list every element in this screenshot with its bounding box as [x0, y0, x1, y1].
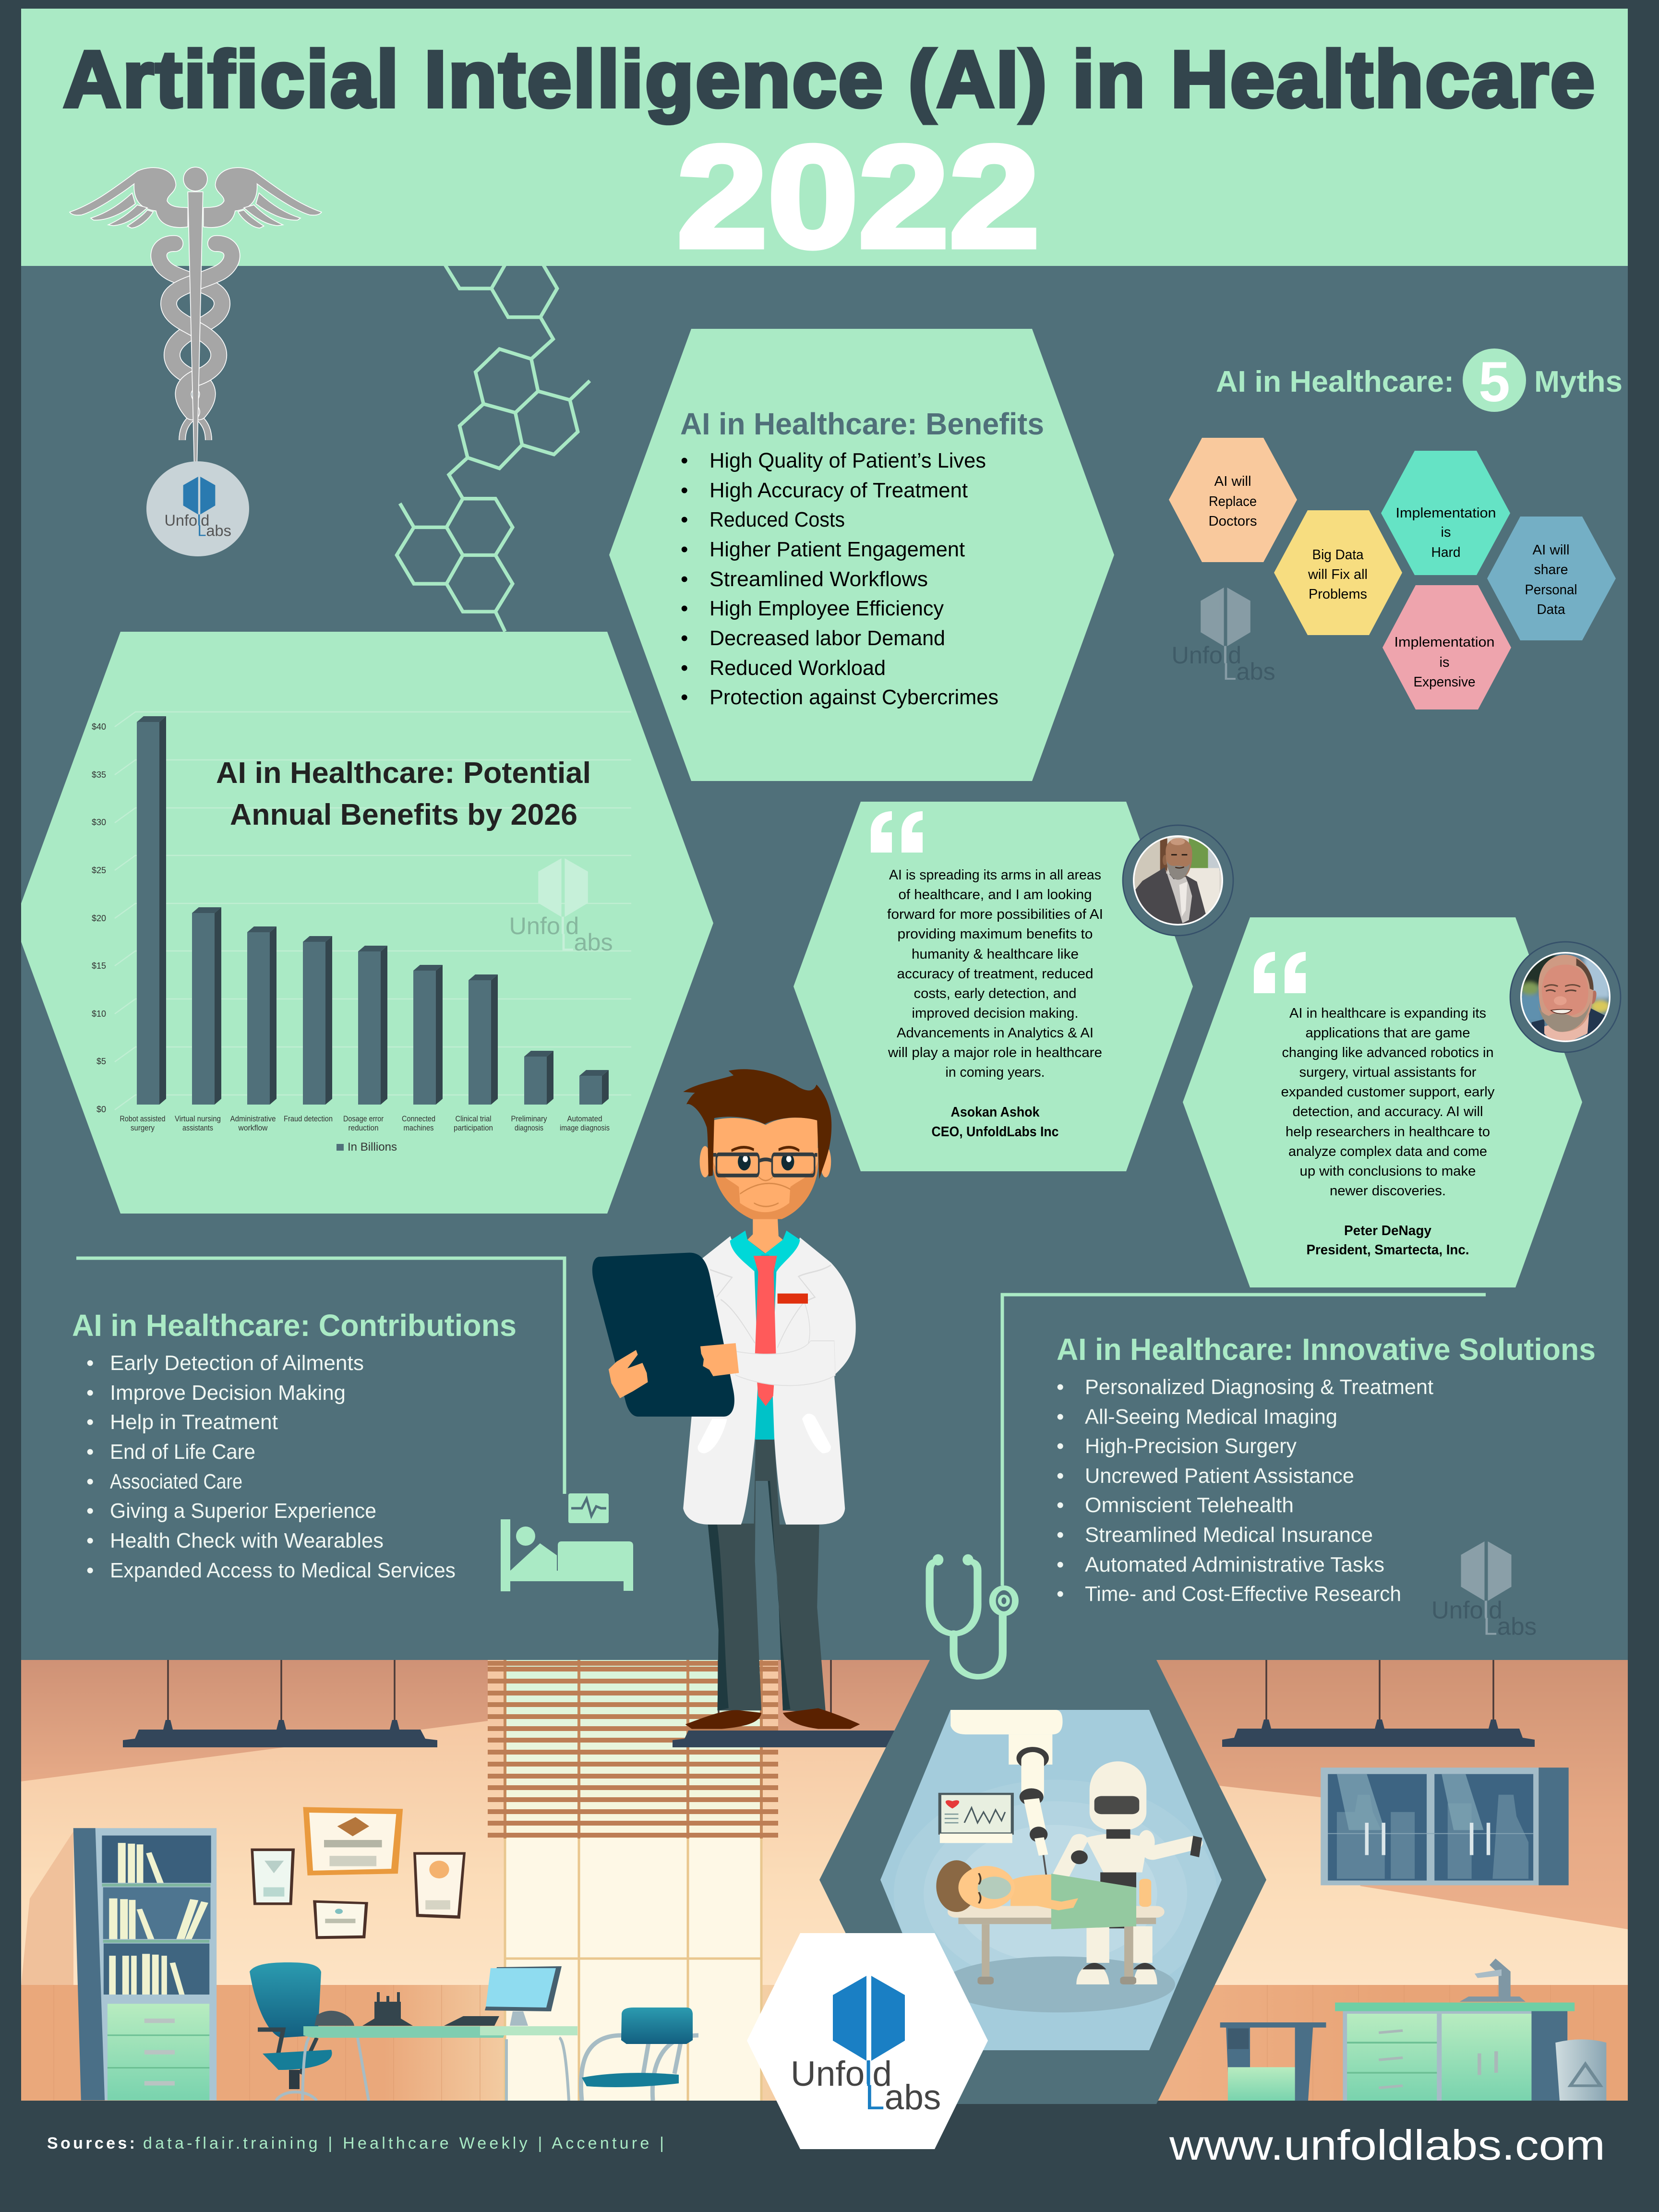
list: benefits: • [681, 656, 688, 680]
list: benefits: High Employee Efficiency [709, 597, 944, 620]
eyebrows [732, 1147, 799, 1151]
quote text: forward for more possibilities of AI [887, 907, 1103, 922]
hexagon: personal data: Personal [1525, 582, 1577, 598]
quote text: President, Smartecta, Inc. [1307, 1242, 1469, 1258]
list: benefits: Higher Patient Engagement [709, 538, 965, 561]
doctor character [592, 1069, 860, 1729]
quote text: AI is spreading its arms in all areas [889, 867, 1101, 883]
website url: www.unfoldlabs.com [1169, 2121, 1605, 2169]
coat pockets [697, 1414, 831, 1454]
list: benefits: • [681, 538, 688, 561]
list: benefits: Reduced Costs [709, 508, 845, 531]
chart y axis labels: $20 [92, 914, 106, 923]
list: innovative solutions: Omniscient Telehealth [1085, 1493, 1294, 1517]
header band [21, 9, 1628, 266]
desk and chairs [250, 1962, 698, 2101]
wainscot [21, 1985, 1628, 2101]
list: contributions: • [86, 1559, 94, 1582]
hexagon: replace doctors: AI will [1214, 474, 1251, 489]
chart category labels: image diagnosis [560, 1123, 610, 1132]
chart category labels: assistants [182, 1123, 213, 1132]
list: innovative solutions [1057, 1375, 1433, 1606]
chart title: AI in Healthcare: Potential [216, 757, 591, 790]
hexagon: replace doctors [1169, 438, 1297, 562]
office chair [250, 1962, 321, 2038]
list: contributions: Improve Decision Making [110, 1381, 346, 1405]
hexagon: personal data: AI will [1532, 542, 1570, 558]
Unfold Labs logo hexagon [747, 1933, 988, 2149]
list: contributions: • [86, 1410, 94, 1434]
list: innovative solutions: • [1057, 1582, 1064, 1606]
chart y axis labels: $10 [92, 1009, 106, 1019]
hexagon: big data: Big Data [1312, 547, 1364, 563]
list: benefits: Streamlined Workflows [709, 567, 928, 591]
panel: annual benefits chart [21, 632, 713, 1214]
watermark logo: solutions [1431, 1541, 1537, 1640]
face [713, 1148, 818, 1219]
list: innovative solutions: All-Seeing Medical Imaging [1085, 1405, 1337, 1429]
icon: quote mark [871, 811, 923, 853]
shoes [685, 1708, 860, 1729]
icon: stethoscope with connector [930, 1295, 1486, 1677]
chart y axis labels: $40 [92, 722, 106, 732]
hexagon: big data: will Fix all [1308, 567, 1368, 582]
quote text [887, 867, 1103, 1140]
heading: myths: AI in Healthcare: [1216, 365, 1454, 398]
quote text: will play a major role in healthcare [888, 1045, 1102, 1060]
ears [700, 1146, 831, 1178]
hexagon: implementation hard [1381, 451, 1510, 575]
quote text: Asokan Ashok [950, 1105, 1040, 1120]
list: benefits: • [681, 567, 688, 591]
list: benefits: • [681, 479, 688, 502]
chart category labels: diagnosis [515, 1123, 543, 1132]
quote text: CEO, UnfoldLabs Inc [931, 1124, 1059, 1140]
chart y axis labels: $25 [92, 866, 106, 875]
icon: caduceus [70, 167, 322, 464]
list: contributions: Associated Care [110, 1470, 242, 1493]
hands [609, 1343, 739, 1398]
list: benefits: • [681, 597, 688, 620]
logo badge: circle: Unfold [164, 512, 209, 529]
hexagon: implementation expensive: is [1440, 655, 1449, 670]
list: innovative solutions: Uncrewed Patient Assistance [1085, 1464, 1354, 1488]
connector line: contributions [76, 1258, 565, 1494]
list: benefits: Decreased labor Demand [709, 626, 945, 650]
right wall cabinet and sink [1220, 1767, 1606, 2101]
hexagon: implementation expensive [1382, 585, 1511, 709]
list: benefits: Protection against Cybercrimes [709, 685, 998, 709]
bar chart [137, 716, 609, 1105]
list: contributions: • [86, 1499, 94, 1523]
neck [747, 1214, 783, 1254]
chart category labels: Clinical trial [455, 1114, 492, 1123]
quote text: surgery, virtual assistants for [1299, 1065, 1477, 1080]
list: contributions: Help in Treatment [110, 1410, 278, 1434]
robot surgery illustration [894, 1710, 1217, 2012]
list: benefits: Reduced Workload [709, 656, 886, 680]
window [488, 1660, 778, 2101]
hexagon: personal data: share [1534, 562, 1568, 577]
panel: quote Peter DeNagy [1183, 917, 1621, 1287]
list: benefits: • [681, 508, 688, 531]
folded arm [736, 1341, 835, 1385]
list: contributions: • [86, 1351, 94, 1375]
list: contributions: • [86, 1440, 94, 1464]
quote text: AI in healthcare is expanding its [1289, 1006, 1486, 1021]
heading: benefits: AI in Healthcare: Benefits [680, 407, 1044, 441]
quote text: humanity & healthcare like [912, 947, 1079, 962]
chart category labels: surgery [131, 1123, 155, 1132]
watermark logo: myths: Unfold [1172, 641, 1241, 669]
watermark logo: chart: Unfold [509, 912, 579, 939]
quote text [1281, 1006, 1495, 1258]
watermark logo: myths [1172, 588, 1275, 685]
hexagon: implementation expensive: Implementation [1394, 635, 1495, 650]
year 2022: 2022 [677, 116, 1040, 277]
chart category labels: participation [454, 1123, 493, 1132]
list: contributions: Expanded Access to Medical Services [110, 1559, 456, 1582]
list: innovative solutions: • [1057, 1493, 1064, 1517]
list: benefits: High Accuracy of Treatment [709, 479, 968, 502]
quote text: changing like advanced robotics in [1282, 1045, 1494, 1060]
hexagon: replace doctors: Replace [1209, 494, 1257, 509]
quote text: applications that are game [1306, 1025, 1470, 1041]
chart category labels [120, 1114, 610, 1132]
collar [730, 1231, 800, 1272]
chart y axis labels: $5 [96, 1057, 106, 1066]
watermark logo: myths: Labs [1223, 658, 1275, 685]
chart category labels: machines [403, 1123, 434, 1132]
ceiling lamps [123, 1660, 1535, 1747]
trousers [708, 1440, 826, 1713]
quote text: costs, early detection, and [914, 986, 1076, 1001]
desk legs [302, 2038, 569, 2101]
hexagon: replace doctors: Doctors [1209, 514, 1257, 529]
chart category labels: Connected [402, 1114, 435, 1123]
hexagon: implementation hard: is [1441, 525, 1451, 540]
chart title: Annual Benefits by 2026 [230, 798, 577, 831]
sources footer: data-flair.training | Healthcare Weekly | Accenture | [143, 2134, 664, 2152]
desk items [485, 1966, 562, 2011]
chart category labels: workflow [238, 1123, 268, 1132]
hexagon: personal data: Data [1537, 602, 1565, 617]
list: benefits: • [681, 449, 688, 472]
molecule hexagon network [397, 263, 590, 632]
quote text: in coming years. [946, 1065, 1045, 1080]
logo badge: circle [146, 461, 249, 556]
wall certificates [251, 1807, 466, 1939]
hexagon: personal data [1487, 517, 1616, 640]
panel: innovative solutions [1057, 1332, 1596, 1640]
hexagon: big data [1274, 510, 1402, 635]
bookcase wall shadow [21, 1831, 73, 1985]
watermark logo: solutions: Labs [1483, 1613, 1537, 1640]
chart category labels: Automated [567, 1114, 602, 1123]
list: contributions [86, 1351, 456, 1582]
quote text: detection, and accuracy. AI will [1292, 1104, 1483, 1119]
quote text: up with conclusions to make [1300, 1164, 1476, 1179]
list: innovative solutions: • [1057, 1434, 1064, 1458]
chart y axis labels [92, 722, 106, 1114]
icon: quote mark [1254, 952, 1306, 993]
chart category labels: Dosage error [343, 1114, 384, 1123]
quote text: accuracy of treatment, reduced [897, 966, 1094, 982]
left wall shadow [21, 1660, 488, 1781]
heading: myths: 5 [1479, 350, 1510, 414]
list: contributions: Giving a Superior Experience [110, 1499, 376, 1523]
chart category labels: Administrative [230, 1114, 276, 1123]
list: benefits: High Quality of Patient’s Lives [709, 449, 986, 472]
quote text: providing maximum benefits to [898, 926, 1093, 942]
watermark logo: solutions: Unfold [1431, 1596, 1503, 1623]
chart y axis labels: $0 [96, 1105, 106, 1114]
badge [778, 1294, 808, 1304]
Unfold Labs logo hexagon: Unfold [791, 2055, 892, 2093]
tablet [592, 1252, 734, 1417]
list: contributions: • [86, 1470, 94, 1493]
glasses [713, 1154, 817, 1176]
chart y axis labels: $15 [92, 961, 106, 971]
list: innovative solutions: • [1057, 1375, 1064, 1399]
chart y axis labels: $30 [92, 817, 106, 827]
list: innovative solutions: Time- and Cost-Effective Research [1085, 1582, 1401, 1606]
list: innovative solutions: • [1057, 1464, 1064, 1488]
list: contributions: End of Life Care [110, 1440, 255, 1464]
hexagon: implementation hard: Hard [1431, 545, 1460, 560]
quote text: help researchers in healthcare to [1286, 1124, 1490, 1140]
list: innovative solutions: High-Precision Surgery [1085, 1434, 1297, 1458]
heading: myths [1216, 349, 1623, 414]
office illustration [21, 1660, 1628, 2101]
chart category labels: Fraud detection [284, 1114, 333, 1123]
surgery hexagon [819, 1660, 1266, 2104]
chart category labels: Preliminary [511, 1114, 547, 1123]
quote text: improved decision making. [912, 1006, 1078, 1021]
list: benefits [681, 449, 998, 709]
hexagon: implementation hard: Implementation [1396, 505, 1496, 521]
chart category labels: Robot assisted [120, 1114, 165, 1123]
right wall shadow [1152, 1660, 1628, 1929]
panel: contributions [72, 1258, 633, 1591]
chart title [216, 757, 591, 831]
Unfold Labs logo hexagon: Labs [865, 2078, 941, 2117]
list: contributions: • [86, 1381, 94, 1405]
list: contributions: Early Detection of Ailments [110, 1351, 364, 1375]
sources footer: Sources: [47, 2134, 135, 2152]
title: Artificial Intelligence (AI) in Healthcare [63, 35, 1595, 124]
heading: myths: Myths [1534, 365, 1623, 398]
panel: benefits [609, 329, 1114, 781]
icon: hospital bed [501, 1493, 633, 1591]
chart y axis labels: $35 [92, 770, 106, 780]
list: innovative solutions: • [1057, 1553, 1064, 1576]
quote text: expanded customer support, early [1281, 1084, 1495, 1100]
hexagon: implementation expensive: Expensive [1413, 674, 1476, 690]
list: benefits: • [681, 626, 688, 650]
watermark logo: chart [509, 858, 613, 956]
teal shirt [754, 1253, 778, 1440]
list: benefits: • [681, 685, 688, 709]
lab coat [683, 1236, 856, 1525]
watermark logo: chart: Labs [560, 928, 613, 956]
bookcase [73, 1828, 216, 2100]
hair [683, 1069, 831, 1179]
panel: myths [1169, 349, 1623, 709]
quote text: Advancements in Analytics & AI [897, 1025, 1094, 1041]
heading: innovative solutions: AI in Healthcare: Innovative Solutions [1057, 1332, 1596, 1367]
necktie [754, 1256, 777, 1406]
portrait: Peter DeNagy [1510, 942, 1621, 1052]
list: innovative solutions: Personalized Diagnosing & Treatment [1085, 1375, 1433, 1399]
eyes [738, 1153, 794, 1170]
logo badge: circle: Labs [197, 522, 231, 540]
chart legend: In Billions [348, 1141, 397, 1154]
list: innovative solutions: Automated Administrative Tasks [1085, 1553, 1384, 1576]
hexagon: big data: Problems [1309, 587, 1367, 602]
quote text: of healthcare, and I am looking [899, 887, 1092, 902]
list: innovative solutions: • [1057, 1523, 1064, 1547]
panel: quote Asokan Ashok [793, 802, 1233, 1171]
desk top [303, 2026, 577, 2038]
quote text: analyze complex data and come [1288, 1144, 1487, 1159]
chart category labels: reduction [349, 1123, 378, 1132]
portrait: Asokan Ashok [1123, 825, 1233, 936]
list: innovative solutions: • [1057, 1405, 1064, 1429]
list: innovative solutions: Streamlined Medical Insurance [1085, 1523, 1373, 1547]
list: contributions: • [86, 1529, 94, 1552]
visitor chair [581, 2035, 698, 2101]
heading: contributions: AI in Healthcare: Contributions [72, 1308, 517, 1343]
quote text: Peter DeNagy [1344, 1223, 1431, 1238]
list: contributions: Health Check with Wearables [110, 1529, 384, 1552]
chart category labels: Virtual nursing [175, 1114, 221, 1123]
chart gridlines [115, 712, 631, 1110]
quote text: newer discoveries. [1330, 1183, 1446, 1199]
mid wall shadow [778, 1660, 930, 1731]
